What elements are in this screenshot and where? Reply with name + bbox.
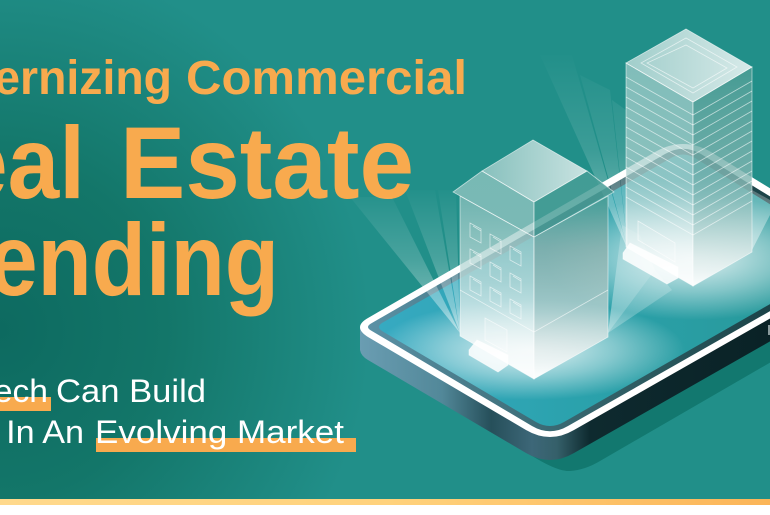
light rays: left building — [350, 190, 672, 333]
office tower — [623, 29, 752, 286]
ray 4 — [608, 225, 655, 333]
roof — [482, 140, 587, 202]
ray 1 — [540, 55, 628, 250]
left wall — [626, 63, 693, 286]
ray 2 — [580, 75, 628, 250]
roof left eave — [453, 171, 534, 237]
left wall — [460, 196, 534, 379]
left building — [453, 140, 614, 379]
steps — [469, 340, 508, 372]
phone cast shadow — [520, 300, 770, 471]
windows — [470, 223, 521, 319]
roof right eave — [534, 171, 614, 237]
screen glows — [375, 196, 770, 400]
ray 1 — [350, 197, 460, 333]
floor divider — [460, 290, 608, 332]
floor lines — [626, 77, 752, 235]
title — [0, 52, 467, 317]
right wall — [534, 196, 608, 379]
subtitle: Evolving Market: Evolving Market — [95, 414, 344, 450]
steps — [623, 243, 678, 284]
roof inset — [641, 38, 737, 93]
phone bezel — [368, 149, 770, 431]
subtitle — [0, 373, 344, 450]
title word: Estate: Estate — [120, 106, 414, 220]
door — [485, 318, 507, 352]
ray 5 — [608, 270, 672, 333]
phone side edge — [360, 250, 770, 460]
title word: Commercial: Commercial — [186, 52, 467, 105]
bottom stripe — [0, 499, 770, 505]
subtitle: Can Build: Can Build — [56, 373, 206, 409]
roof — [626, 29, 752, 102]
phone — [360, 144, 770, 471]
left building backing — [453, 140, 614, 379]
ray 3 — [438, 190, 460, 333]
door — [638, 221, 675, 262]
glow under left building — [390, 308, 678, 398]
subtitle underline: Evolving Market — [96, 438, 356, 452]
ray 2 — [405, 190, 460, 333]
glow under tower — [582, 204, 770, 318]
phone screen — [379, 154, 770, 426]
office tower backing — [626, 29, 752, 286]
side button — [768, 325, 770, 335]
right wall — [693, 67, 752, 286]
ray 4 — [752, 190, 770, 250]
ray 3 — [612, 100, 628, 250]
light rays: tower — [540, 55, 770, 250]
subtitle underline: Fintech — [0, 397, 51, 411]
phone white frame — [360, 144, 770, 437]
